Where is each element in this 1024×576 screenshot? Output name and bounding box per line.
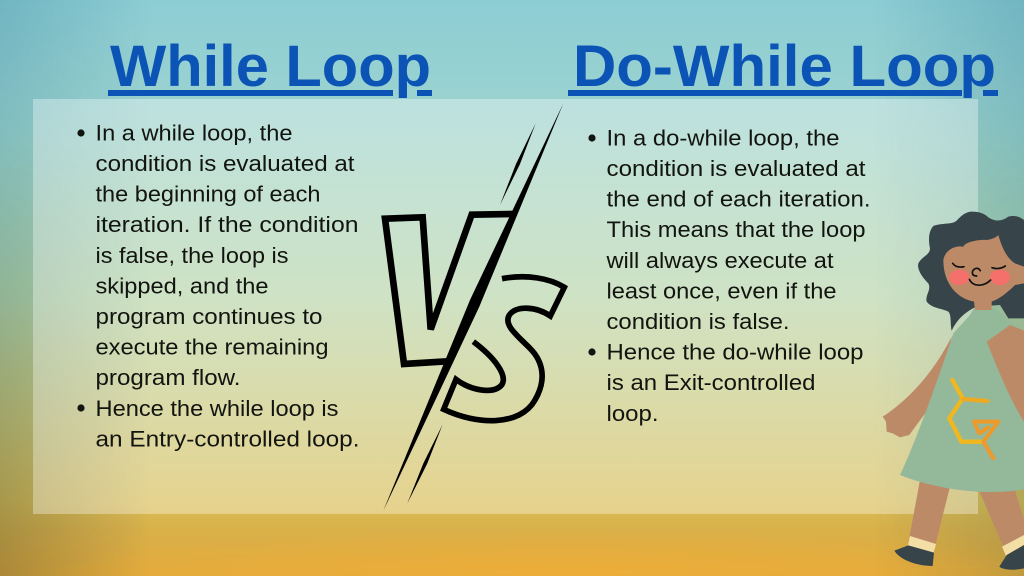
text block: do-while loop points: will always execute at: [605, 248, 834, 273]
left arm: [883, 337, 952, 437]
text block: while loop points: program continues to: [96, 304, 322, 329]
text block: do-while loop points: least once, even if the: [606, 278, 836, 303]
eyes, nose and mouth: [953, 263, 1005, 285]
text block: while loop points: an Entry-controlled loop.: [96, 426, 360, 451]
text block: do-while loop points: In a do-while loop, the: [606, 126, 840, 150]
text block: while loop points: In a while loop, the: [96, 120, 292, 146]
panel: comparison background: [33, 99, 978, 514]
text block: do-while loop points: This means that the loop: [606, 217, 866, 242]
hair: [918, 212, 1024, 331]
text block: while loop points: Hence the while loop is: [96, 396, 338, 421]
text block: while loop points: condition is evaluated at: [96, 151, 355, 176]
letter V: [385, 214, 514, 364]
icon: girl character: [883, 212, 1024, 570]
slash strokes: [383, 103, 563, 511]
text block: do-while loop points: [588, 126, 870, 426]
text block: while loop points: skipped, and the: [96, 273, 268, 298]
text block: while loop points: the beginning of each: [96, 182, 320, 207]
right arm: [987, 325, 1024, 422]
text block: do-while loop points: Hence the do-while loop: [606, 340, 864, 365]
dress logo: [949, 380, 998, 458]
socks: [908, 535, 1024, 556]
text block: do-while loop points: is an Exit-controlled: [606, 370, 816, 395]
icon: VS emblem: [383, 103, 564, 511]
text block: do-while loop points: the end of each iteration.: [606, 187, 870, 212]
dress: [900, 307, 1024, 492]
heading: While Loop: While Loop: [110, 34, 431, 99]
heading: Do-While Loop: Do-While Loop: [573, 34, 996, 99]
text block: while loop points: [77, 120, 360, 451]
text block: do-while loop points: loop.: [606, 401, 658, 426]
text block: do-while loop points: condition is false.: [606, 309, 790, 334]
face and neck: [943, 235, 1024, 310]
text block: while loop points: program flow.: [96, 365, 240, 390]
legs: [909, 480, 1024, 547]
shoes: [894, 545, 1024, 570]
letter S: [444, 277, 564, 421]
cheeks: [949, 270, 1010, 285]
text block: while loop points: execute the remaining: [96, 335, 328, 360]
text block: while loop points: iteration. If the condition: [96, 212, 358, 237]
text block: do-while loop points: condition is evaluated at: [606, 156, 866, 181]
text block: while loop points: is false, the loop is: [96, 243, 288, 268]
